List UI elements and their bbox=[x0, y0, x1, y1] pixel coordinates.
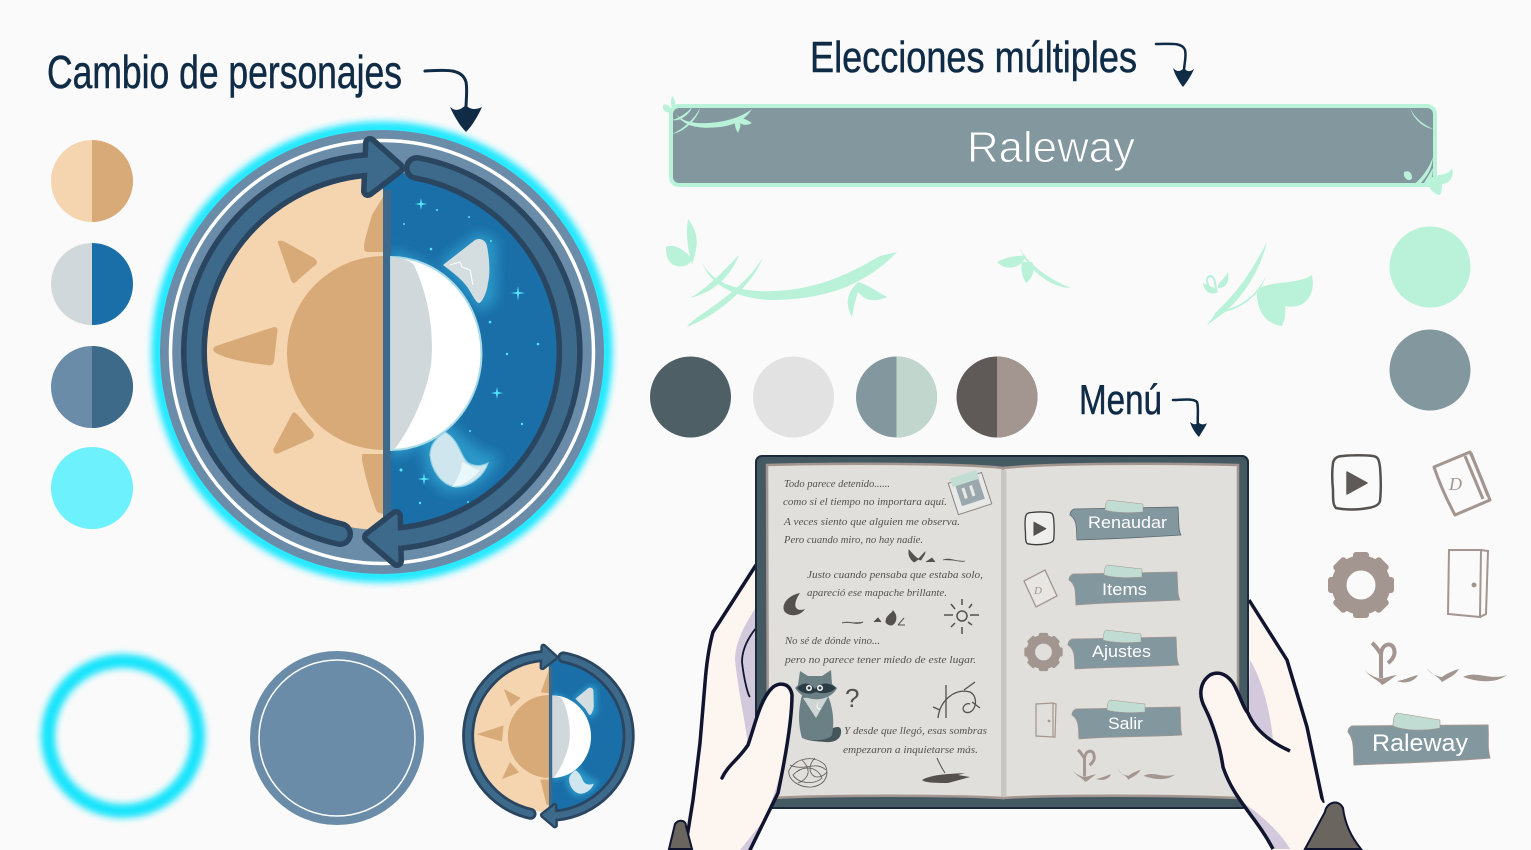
banner: choice button bbox=[663, 96, 1453, 195]
main icon: sun and moon switch bbox=[160, 130, 604, 574]
title: Cambio de personajes: Cambio de personajes bbox=[47, 46, 402, 98]
story text: No sé de dónde vino... bbox=[784, 636, 880, 647]
banner label: Raleway bbox=[967, 123, 1135, 172]
right thumb bbox=[1200, 673, 1323, 850]
raccoon character bbox=[795, 670, 841, 742]
icon: door bbox=[1036, 703, 1056, 737]
book: open notebook menu bbox=[756, 456, 1248, 808]
menu row: Items bbox=[1024, 565, 1180, 607]
button: Items bbox=[1069, 565, 1180, 605]
vine decoration 3 bbox=[1203, 242, 1313, 326]
story text: como si el tiempo no importara aquí. bbox=[783, 497, 947, 508]
palette: character colours bbox=[51, 140, 133, 529]
icon: book bbox=[1024, 570, 1057, 607]
right hand back bbox=[1215, 600, 1323, 850]
story text: empezaron a inquietarse más. bbox=[843, 745, 978, 756]
sample button: Raleway: Raleway bbox=[1372, 730, 1468, 757]
doodles on left page: ? bbox=[845, 683, 859, 713]
title: Menú: Menú bbox=[1079, 376, 1162, 423]
button: Renaudar: Renaudar bbox=[1088, 513, 1167, 532]
menu row: Salir bbox=[1036, 700, 1182, 739]
button: Renaudar bbox=[1070, 500, 1181, 540]
glow halo of main icon bbox=[158, 128, 606, 576]
button: Ajustes bbox=[1068, 630, 1179, 669]
menu row: Ajustes bbox=[1024, 630, 1179, 671]
story text: pero no parece tener miedo de este lugar. bbox=[784, 655, 976, 666]
sample button: Raleway bbox=[1348, 713, 1490, 765]
book letter: D bbox=[1448, 474, 1462, 494]
story text: Justo cuando pensaba que estaba solo, bbox=[807, 570, 983, 581]
icon: large gear bbox=[1328, 552, 1394, 618]
vine decoration 1 bbox=[666, 219, 897, 327]
banner vines bbox=[663, 96, 1453, 195]
right page bbox=[1003, 464, 1238, 798]
doodles on left page bbox=[784, 550, 980, 787]
pause photo sticker bbox=[947, 469, 992, 515]
arrow: to choice banner bbox=[1156, 44, 1194, 87]
plant doodle on right page bbox=[1073, 750, 1175, 782]
spine bbox=[1001, 470, 1006, 797]
vine decoration 2 bbox=[997, 245, 1071, 288]
story text: apareció ese mapache brillante. bbox=[807, 588, 947, 599]
button: Ajustes: Ajustes bbox=[1092, 642, 1151, 661]
story text: Todo parece detenido...... bbox=[784, 479, 890, 490]
steel disc component bbox=[250, 651, 424, 825]
icon: large door bbox=[1448, 550, 1488, 617]
left cuff bbox=[669, 821, 692, 849]
icon: gear bbox=[1024, 633, 1063, 671]
icon: book: D bbox=[1033, 585, 1042, 597]
icon: play bbox=[1025, 512, 1054, 545]
left page bbox=[767, 464, 1003, 798]
story text: Pero cuando miro, no hay nadie. bbox=[783, 535, 923, 546]
small icon without ring bbox=[468, 647, 629, 825]
button: Salir bbox=[1072, 700, 1182, 739]
left thumb bbox=[685, 684, 792, 850]
story text: A veces siento que alguien me observa. bbox=[783, 517, 960, 528]
palette: mint and slate bbox=[1390, 226, 1470, 410]
plant decoration large bbox=[1365, 643, 1507, 685]
palette: gray tones bbox=[650, 356, 1038, 438]
title: Elecciones múltiples: Elecciones múltiples bbox=[810, 33, 1137, 82]
arrow: to character switch icon bbox=[425, 70, 482, 132]
menu row: Renaudar bbox=[1025, 500, 1181, 545]
left hand back bbox=[685, 565, 790, 850]
story text bbox=[783, 479, 987, 756]
story text: Y desde que llegó, esas sombras bbox=[844, 726, 987, 737]
icon: large play bbox=[1332, 455, 1381, 510]
button: Items: Items bbox=[1102, 580, 1147, 599]
icon: large book bbox=[1434, 452, 1490, 515]
arrow: to book menu bbox=[1173, 400, 1207, 437]
right cuff bbox=[1305, 802, 1361, 849]
button: Salir: Salir bbox=[1108, 714, 1143, 733]
glow ring component bbox=[48, 661, 198, 811]
